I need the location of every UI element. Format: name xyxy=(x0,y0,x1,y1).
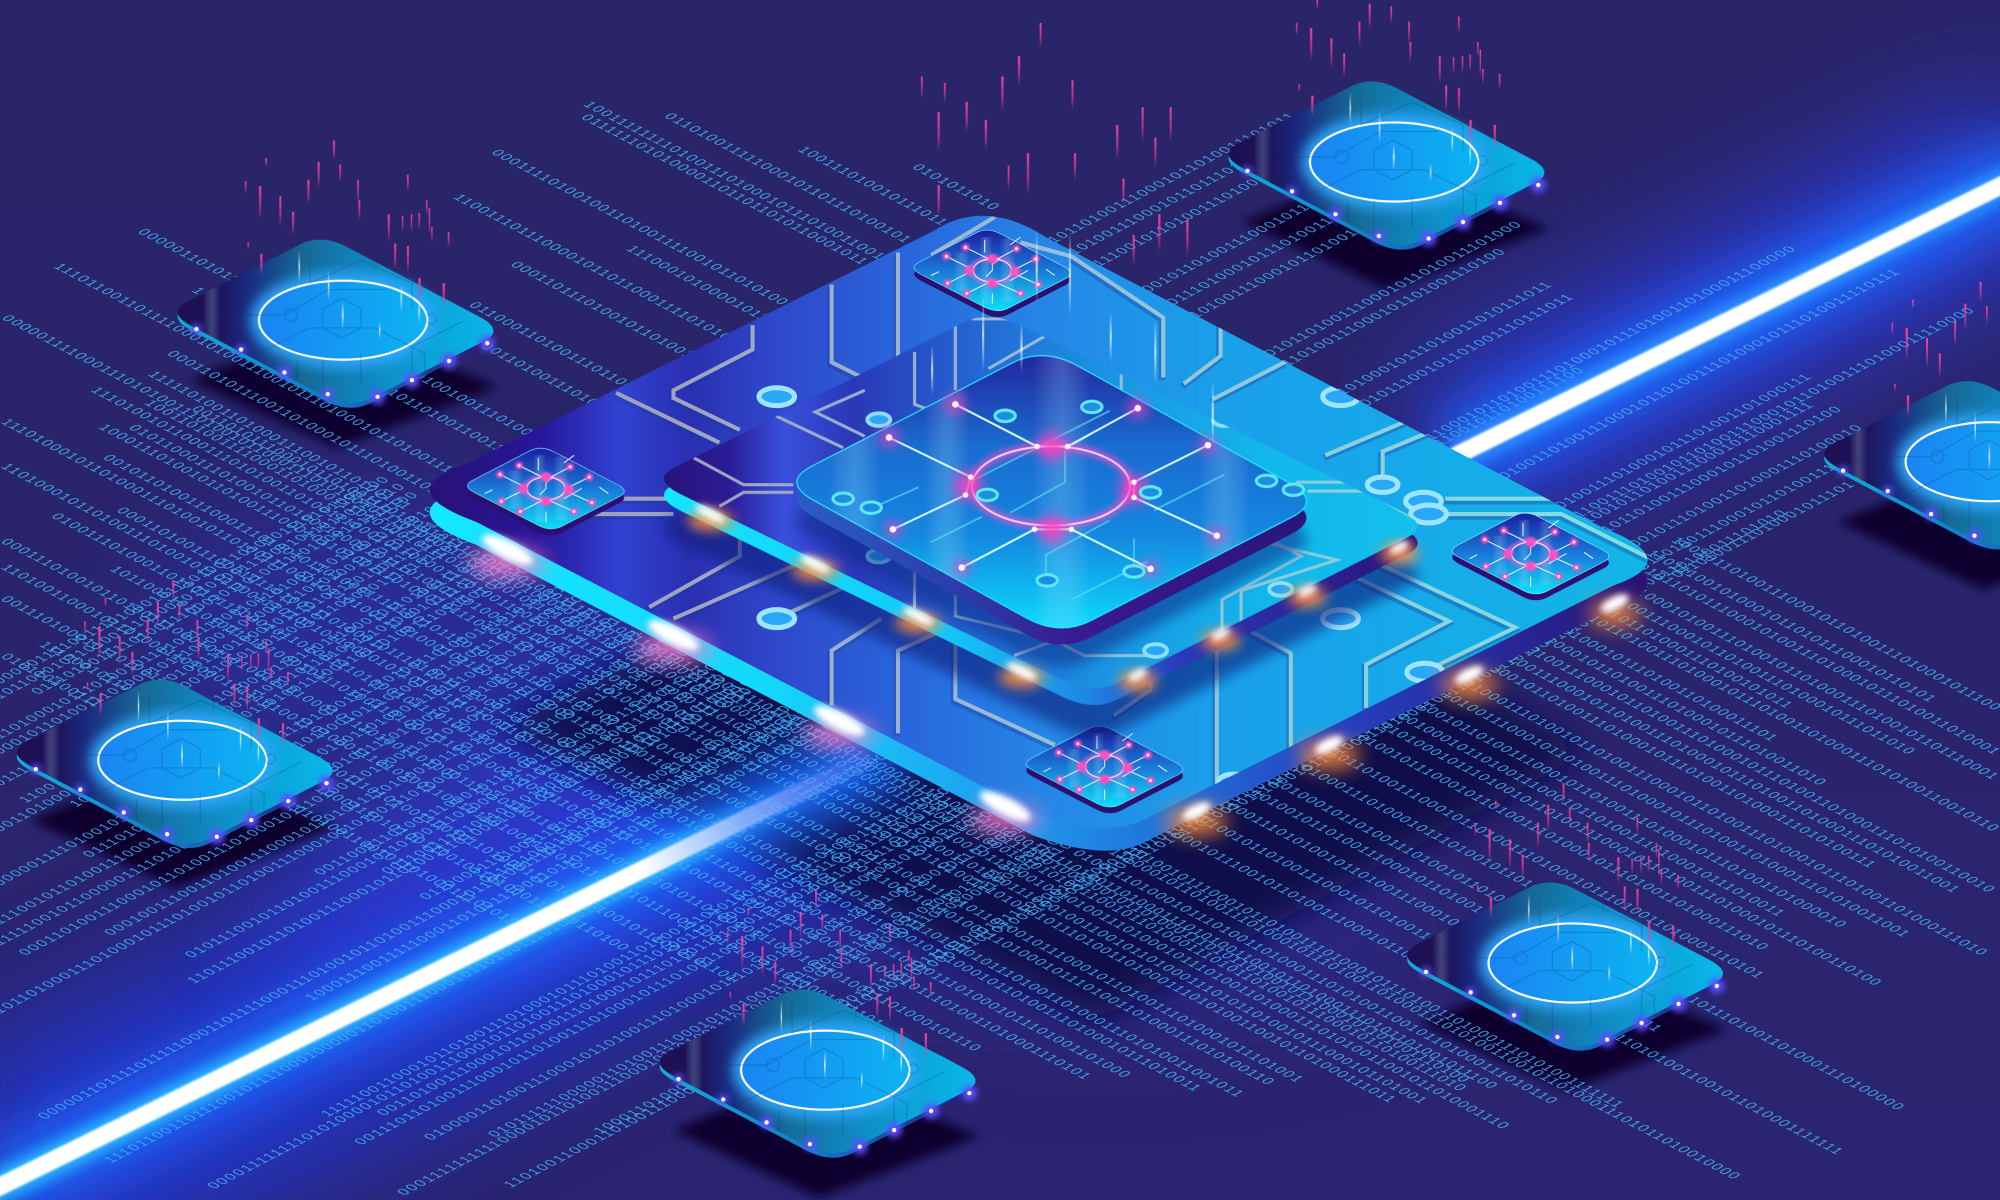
middle board top face xyxy=(664,317,1418,689)
particles above main board xyxy=(921,23,1214,446)
binary rows running down-right: 0110100111000101101001110100010111011010 xyxy=(1582,580,1921,757)
satellite chip: right edge xyxy=(1824,282,2000,549)
binary rows running up-right: 000001111010010110100111000101101001110100010111010011010001110101001100 xyxy=(0,574,588,887)
binary rows running down-right: 001110100010110100111000101101001110100010111010011 xyxy=(1362,695,1791,919)
top board face xyxy=(797,356,1306,628)
binary rows running down-right: 11101001011010011100010110100111010001011101001101000010 xyxy=(1382,684,1853,930)
binary rows running up-right: 00010111010011010001110100010 xyxy=(1616,422,1867,553)
main board shadow xyxy=(497,446,1588,1020)
binary rows running up-right: 001100011010011100010110100111010001011101001101000 xyxy=(309,652,739,877)
binary rows running up-right: 110100111000101101001110001 xyxy=(1177,202,1411,324)
main circuit board xyxy=(430,216,1648,851)
binary rows running up-right: 1101001100011010011100010110100111010001011101001101000111010100110010110100011101011010010111000101101001110100010111010011010001110 xyxy=(499,617,1594,1190)
binary rows running up-right: 01100111010010110100111000101101001110100011110000 xyxy=(1560,304,1979,524)
binary rows running down-right: 101100010110100111010001011101001101000111010100110010110100011101011010010111000101101001110100010111010011010001110101 xyxy=(106,564,1097,1082)
binary rows running up-right: 00110100011101010011001011010011100010110100111010001011101001101 xyxy=(0,549,532,833)
binary rows running up-right: 1001110100010111010010110100111000101101001110100010111010 xyxy=(65,555,551,809)
binary rows running down-right: 01100011010011101100 xyxy=(465,300,641,392)
binary rows running up-right: 10110100011101000101110100101101001110001011010011101000101110100110100011101010011001 xyxy=(0,642,703,1015)
binary rows running down-right: 110100010110100111010010110100011101001011100010110100111010001011101001101000111010100110010110100011101011010010111000101101001110100010111010011 xyxy=(0,461,1207,1093)
binary rows running down-right: 011101001011100010110100111010001011101001101000111010 xyxy=(1322,716,1774,952)
binary rows running down-right: 00011011101001011010011 xyxy=(507,259,708,364)
binary rows running down-right: 0011101001011010011100010110100111010001011101001101000 xyxy=(1215,771,1677,1013)
binary rows running up-right: 001101001110001011010011101000101110100110100011101010011001011010001110101 xyxy=(372,791,997,1117)
top board shadow xyxy=(793,507,1312,672)
binary rows running up-right: 110010110100111010001011101001011010011100010110100111010000 xyxy=(14,542,517,805)
satellite chip: lower right xyxy=(1407,783,1724,1051)
binary rows running down-right: 0011010111000101101001110100010111010011010001110101001100101101000111010110100101110001011010011101000101110100110100011101010011001011010001110101101001011100 xyxy=(188,404,1503,1091)
binary rows running up-right: 1001011010011100010110100111010001 xyxy=(1129,146,1420,298)
binary rows running down-right: 0000011010111011001010011100010111010010011101001 xyxy=(134,226,547,442)
binary rows running down-right: 01110100101101001110001011010011101000101110100110100011101010011001011010001111111 xyxy=(1164,798,1849,1157)
binary rows running down-right: 001110100010110100111010001011101001101000111010100110010110100011101011010010111000101101 xyxy=(0,594,744,984)
top board shine xyxy=(829,344,1250,638)
main board side xyxy=(430,239,1647,851)
binary rows running up-right: 0110001011010011101000101110100110100011100000 xyxy=(1412,243,1800,446)
binary rows running up-right: 110100010111010011010111011 xyxy=(1324,279,1557,400)
top board faint traces xyxy=(867,411,1224,599)
binary rows running down-right: 001011010111000101001110100010111010011010001 xyxy=(1625,557,2000,757)
small chip: left xyxy=(468,448,624,535)
binary rows running down-right: 0101101001110001011010011101000101110100110100011101010011001 xyxy=(1405,672,1916,939)
binary rows running up-right: 0110100111010001011101 xyxy=(1667,479,1859,579)
binary rows running up-right: 000001101001110100010111010011010001110101001100 xyxy=(0,474,394,686)
binary rows running up-right: 0101111110000011010011100010110100111010001011101001101000111010100110 xyxy=(483,835,1065,1139)
binary rows running up-right: 00101101001110001011010011101000 xyxy=(1251,218,1526,362)
binary rows running up-right: 00110011101001011010011100010110100111010001011 xyxy=(377,669,773,876)
binary rows running down-right: 000110100111000101101001110100010111010011010001110101001100101101000111010110100101110001011010011101000101110100110100011101010011001011 xyxy=(113,505,1250,1099)
satellite chip: bottom xyxy=(660,890,977,1158)
binary rows running down-right: 011101000101110100110100011101 xyxy=(1526,609,1784,743)
small chip: top xyxy=(914,230,1071,317)
binary rows running up-right: 00111010001011101001101000111010 xyxy=(1154,168,1428,311)
binary rows running down-right: 1011100010110100111010001011101001101000111010100110010110100011101011010010000 xyxy=(1088,838,1746,1182)
binary rows running down-right: 111011001101111000101001110010111010001011010011101 xyxy=(50,261,476,483)
small chip: right xyxy=(1452,513,1609,600)
binary rows running down-right: 111010010110001110101001101001110001011010011101001110100010111010011010001110101001100101101000111010110100101110001011010011101000101110100110100011101010011001011010001110 xyxy=(87,385,1515,1131)
top board side xyxy=(797,372,1306,644)
binary rows running up-right: 00010110100111010001011101001101000111010100110010110100 xyxy=(0,510,459,756)
binary rows running down-right: 101110001010011101001011010001110100101101110001 xyxy=(1600,570,2000,782)
binary rows running down-right: 101110100010110100111010010110100111000101101001110100010111010011010001110100000 xyxy=(1237,760,1910,1112)
binary rows running down-right: 01001110100010111010011010001110101001100101101000111010110 xyxy=(1069,848,1563,1106)
processor lines xyxy=(889,404,1217,569)
middle board shadow xyxy=(660,509,1424,746)
processor nodes xyxy=(886,401,1220,572)
binary rows running up-right: 1110110011011100101111000100000110100111000101101001110100010111010011010001110101001100101101000 xyxy=(100,746,901,1165)
binary rows running down-right: 1100111011100001011011000111101010 xyxy=(450,192,738,342)
binary rows running up-right: 11001011010011100010110001111 xyxy=(1570,399,1818,529)
binary rows running down-right: 00110100011101000101110100101101001110001011010 xyxy=(1265,746,1662,953)
binary rows running down-right: 11100010100001011 xyxy=(623,243,775,323)
light beam: lower left xyxy=(0,746,893,1193)
binary rows running down-right: 0001111010010011010011110010110101001 xyxy=(488,147,803,312)
binary rows running down-right: 111000101101001110100010111010011010001110101001100101101000111010110100 xyxy=(36,639,635,953)
binary rows running down-right: 110100011101010010110100111000101101001110100010111010011 xyxy=(1191,784,1668,1034)
binary rows running down-right: 0101011010 xyxy=(909,162,1005,212)
pink ring xyxy=(972,446,1130,526)
binary rows running down-right: 000110101110011010001011101001101 xyxy=(163,348,446,496)
binary rows running down-right: 011100010110100111010001011101001101000111010100111 xyxy=(1454,646,1882,870)
binary rows running down-right: 110100110001011010011101000101110100110100011101010011001011010001110101101001011100010110100111010001011101 xyxy=(0,562,890,1029)
binary rows running down-right: 1001111111101001110100010111010011001 xyxy=(580,99,891,262)
binary rows running up-right: 00011111111110000101101001110001011010011101000101110100110100011101010011001011010 xyxy=(393,839,1077,1197)
main board right edge lights xyxy=(1166,591,1640,835)
binary rows running up-right: 010110100111000101101001110100 xyxy=(1588,403,1846,538)
binary rows running down-right: 11010001011100101101001110001011010011101001000 xyxy=(1137,812,1534,1020)
binary rows running up-right: 00100110100111000101101001110100010111010011110111 xyxy=(1486,266,1904,485)
light beam: upper right xyxy=(1454,166,2000,457)
binary rows running down-right: 10101100011101001011010011100010110100111010001011101001101000111010 xyxy=(1426,661,1993,958)
binary rows running down-right: 001011010011100011101001011010001110100101110100010110011101000101110100110100011101010011001011010001110101101001011100010110100111010001011101001 xyxy=(99,452,1309,1085)
binary rows running down-right: 10011101000101110100101101001110001011010011101000101110100110100 xyxy=(1344,704,1887,988)
binary rows running up-right: 11100101101001110001011010011101000101110100110100011101010011001011010001110101 xyxy=(0,579,653,926)
binary rows running down-right: 100010110100111010001011101001101000111010100110010110 xyxy=(1551,596,2000,833)
binary rows running up-right: 1110010110100111100 xyxy=(1422,364,1589,451)
binary rows running up-right: 001011100101101001110111011 xyxy=(1347,291,1578,412)
satellite chip: left xyxy=(17,580,334,848)
top processor board xyxy=(797,344,1306,644)
binary rows running down-right: 010110100111010001011101001101000111010100110010110100011101011 xyxy=(0,651,524,926)
satellite chip: top xyxy=(1229,0,1546,250)
binary rows running down-right: 100110100111100011010001110101001011101001100101101000111010110100101110001011010011101000101110100110100011101010011001011010001110101101001011100010110100111010 xyxy=(141,398,1472,1093)
binary rows running up-right: 111110010110000011110100101101001110001011010011101000101110100110100011101010 xyxy=(0,610,634,947)
binary rows running down-right: 1001011010011100010110100111010001011100 xyxy=(1668,535,2000,713)
binary rows running up-right: 011101000101110100110100011101010011001011010001110101101001 xyxy=(0,525,491,788)
binary rows running up-right: 111110011000101101001110100010111010011010001110101001100101101000111010110100 xyxy=(316,780,963,1119)
processor node glows xyxy=(880,395,1224,577)
binary rows running up-right: 1110100111000101101001110100 xyxy=(1269,246,1510,372)
binary rows running down-right: 11101001110001011010011101000101110100110100011101010011001 xyxy=(1472,637,1965,895)
binary rows running up-right: 100011100111110001101001110001011010011101000101110100110100011101 xyxy=(301,716,848,1002)
small chip: bottom xyxy=(1026,726,1183,813)
binary rows running up-right: 01011100101101001110001011010011101000101110100110100011101010011001 xyxy=(180,663,748,960)
binary rows running up-right: 0101101001110001011010011101011 xyxy=(1035,110,1300,249)
binary rows running up-right: 011100101101001110100011 xyxy=(1079,164,1288,272)
binary rows running up-right: 0001001110011010011100010110100111010001011101001101000111010100110011 xyxy=(100,633,683,937)
binary rows running down-right: 11111010011010001110010110100101 xyxy=(144,369,418,512)
binary rows running up-right: 01100001101001110100010111010011010001110101001 xyxy=(415,694,812,901)
binary rows running down-right: 110010110100111000101101001110100010111010011010001110101 xyxy=(1293,731,1770,981)
main board circuit traces xyxy=(585,217,1648,792)
binary rows running down-right: 0011010010111000101101001110100010111010011010001110101001111111 xyxy=(1098,832,1630,1110)
binary rows running up-right: 1010011100010110100111010001011101001101000111010100 xyxy=(39,517,477,746)
middle board side xyxy=(664,333,1418,705)
top board via rings xyxy=(833,401,1304,586)
binary rows running up-right: 10100111010001011101001101000111 xyxy=(1542,371,1816,514)
binary rows running down-right: 000001111000111010100111010010110001110101001011101000110100111010001011100101101000111010110010100111010001011101001101000111010100110010110100011101011010010111000101101001110100 xyxy=(0,313,1476,1085)
binary rows running up-right: 10110001011010011101001011010011100010110100111010 xyxy=(0,481,410,701)
satellite chip: upper left xyxy=(178,140,495,408)
binary rows running down-right: 110100111010001101001110100 xyxy=(380,290,613,412)
binary rows running up-right: 10001101000111010010110100111000101101001110100010111010011010001110101001100101101000111010110100101110001011010011101000101110100110100011101010 xyxy=(589,507,1791,1136)
binary rows running up-right: 00111011010011100010110100111010001011101001101000111010100110010110100011101010 xyxy=(350,799,1014,1147)
binary rows running down-right: 010011101000110100101110001011010011101000101110100110100011101010011001011010001110101101001011100010110100111010001011101001101000 xyxy=(48,511,1137,1080)
binary rows running up-right: 11010011100010110111010011 xyxy=(1056,143,1280,260)
binary rows running up-right: 011011000110100111000101101001110100010111 xyxy=(474,699,829,884)
binary rows running down-right: 100011101001011010011100010110100111010001011101001101000111010100110010110100011101011010010111000101101001110100010111010011010001110101001100101101000111011 xyxy=(95,422,1402,1105)
binary rows running down-right: 10011000101101001110100010111010011010 xyxy=(1508,618,1832,788)
binary rows running up-right: 000001101111011111000110111100011101001011010011100010110100111010001011101001101000111010100110 xyxy=(33,708,823,1121)
binary rows running down-right: 11011100101000101101011100010110101 xyxy=(1643,548,1942,704)
binary rows running down-right: 111010001011010001110100101101001110001011010011101000101110100110100011101010011001011010001110101101001011100010110100111010001011101001101000111010100110 xyxy=(0,416,1280,1087)
binary rows running up-right: 0000111111110101000010110100111000101101001110100010111010011010001110101001100101101000110 xyxy=(203,798,955,1191)
binary rows running up-right: 11011100101101001110001011010011101000101110100110100011101010011001011 xyxy=(183,677,773,985)
binary rows running up-right: 00011010011100010110100111010001011101001101000111010100110010110100011101011010 xyxy=(14,609,680,957)
binary rows running up-right: 01110100101101001110001011010011101000101110100 xyxy=(27,489,423,696)
binary rows running down-right: 011010011111000101101110100101 xyxy=(661,111,917,245)
binary rows running down-right: 010110001110100101101001110001011101000110100111010001011100101101000111010110010100111010001011101001101000111010100110010110100011101011010010111000101101001 xyxy=(125,422,1433,1106)
binary rows running down-right: 000111010010110100111000101101001110100010111010011010001110101001100101101000111010110100101110001011010011101000101110 xyxy=(0,536,987,1054)
main board left edge lights xyxy=(469,529,1041,833)
middle board edge lights xyxy=(688,502,1418,691)
binary rows running down-right: 101001110100011010111000101101001100111 xyxy=(188,285,519,458)
binary rows running up-right: 11010011100010110100111010 xyxy=(1641,448,1866,566)
binary rows running up-right: 1101000101110100101101001110001011010011101000101110100 xyxy=(0,499,450,741)
main board top face xyxy=(430,216,1647,828)
binary rows running down-right: 111001011010001110100101011 xyxy=(1565,588,1799,710)
binary rows running up-right: 010000110100111000101101001110100010111010011010001110101001100101101000111010110 xyxy=(419,790,1093,1142)
middle board traces xyxy=(694,319,1416,663)
binary rows running down-right: 0011010011100010110100111010001011101001101000111010100110010 xyxy=(1490,628,2000,895)
binary rows running up-right: 011101001011100010110100111010001011101001101000111010100110010110100011 xyxy=(78,546,678,859)
binary rows running down-right: 01111110101000011011011010110001011 xyxy=(578,112,874,267)
pink ring glow xyxy=(972,446,1130,526)
binary rows running down-right: 1001110100101110110 xyxy=(794,144,962,232)
middle circuit board xyxy=(664,317,1418,705)
main board via rings xyxy=(759,388,1446,790)
